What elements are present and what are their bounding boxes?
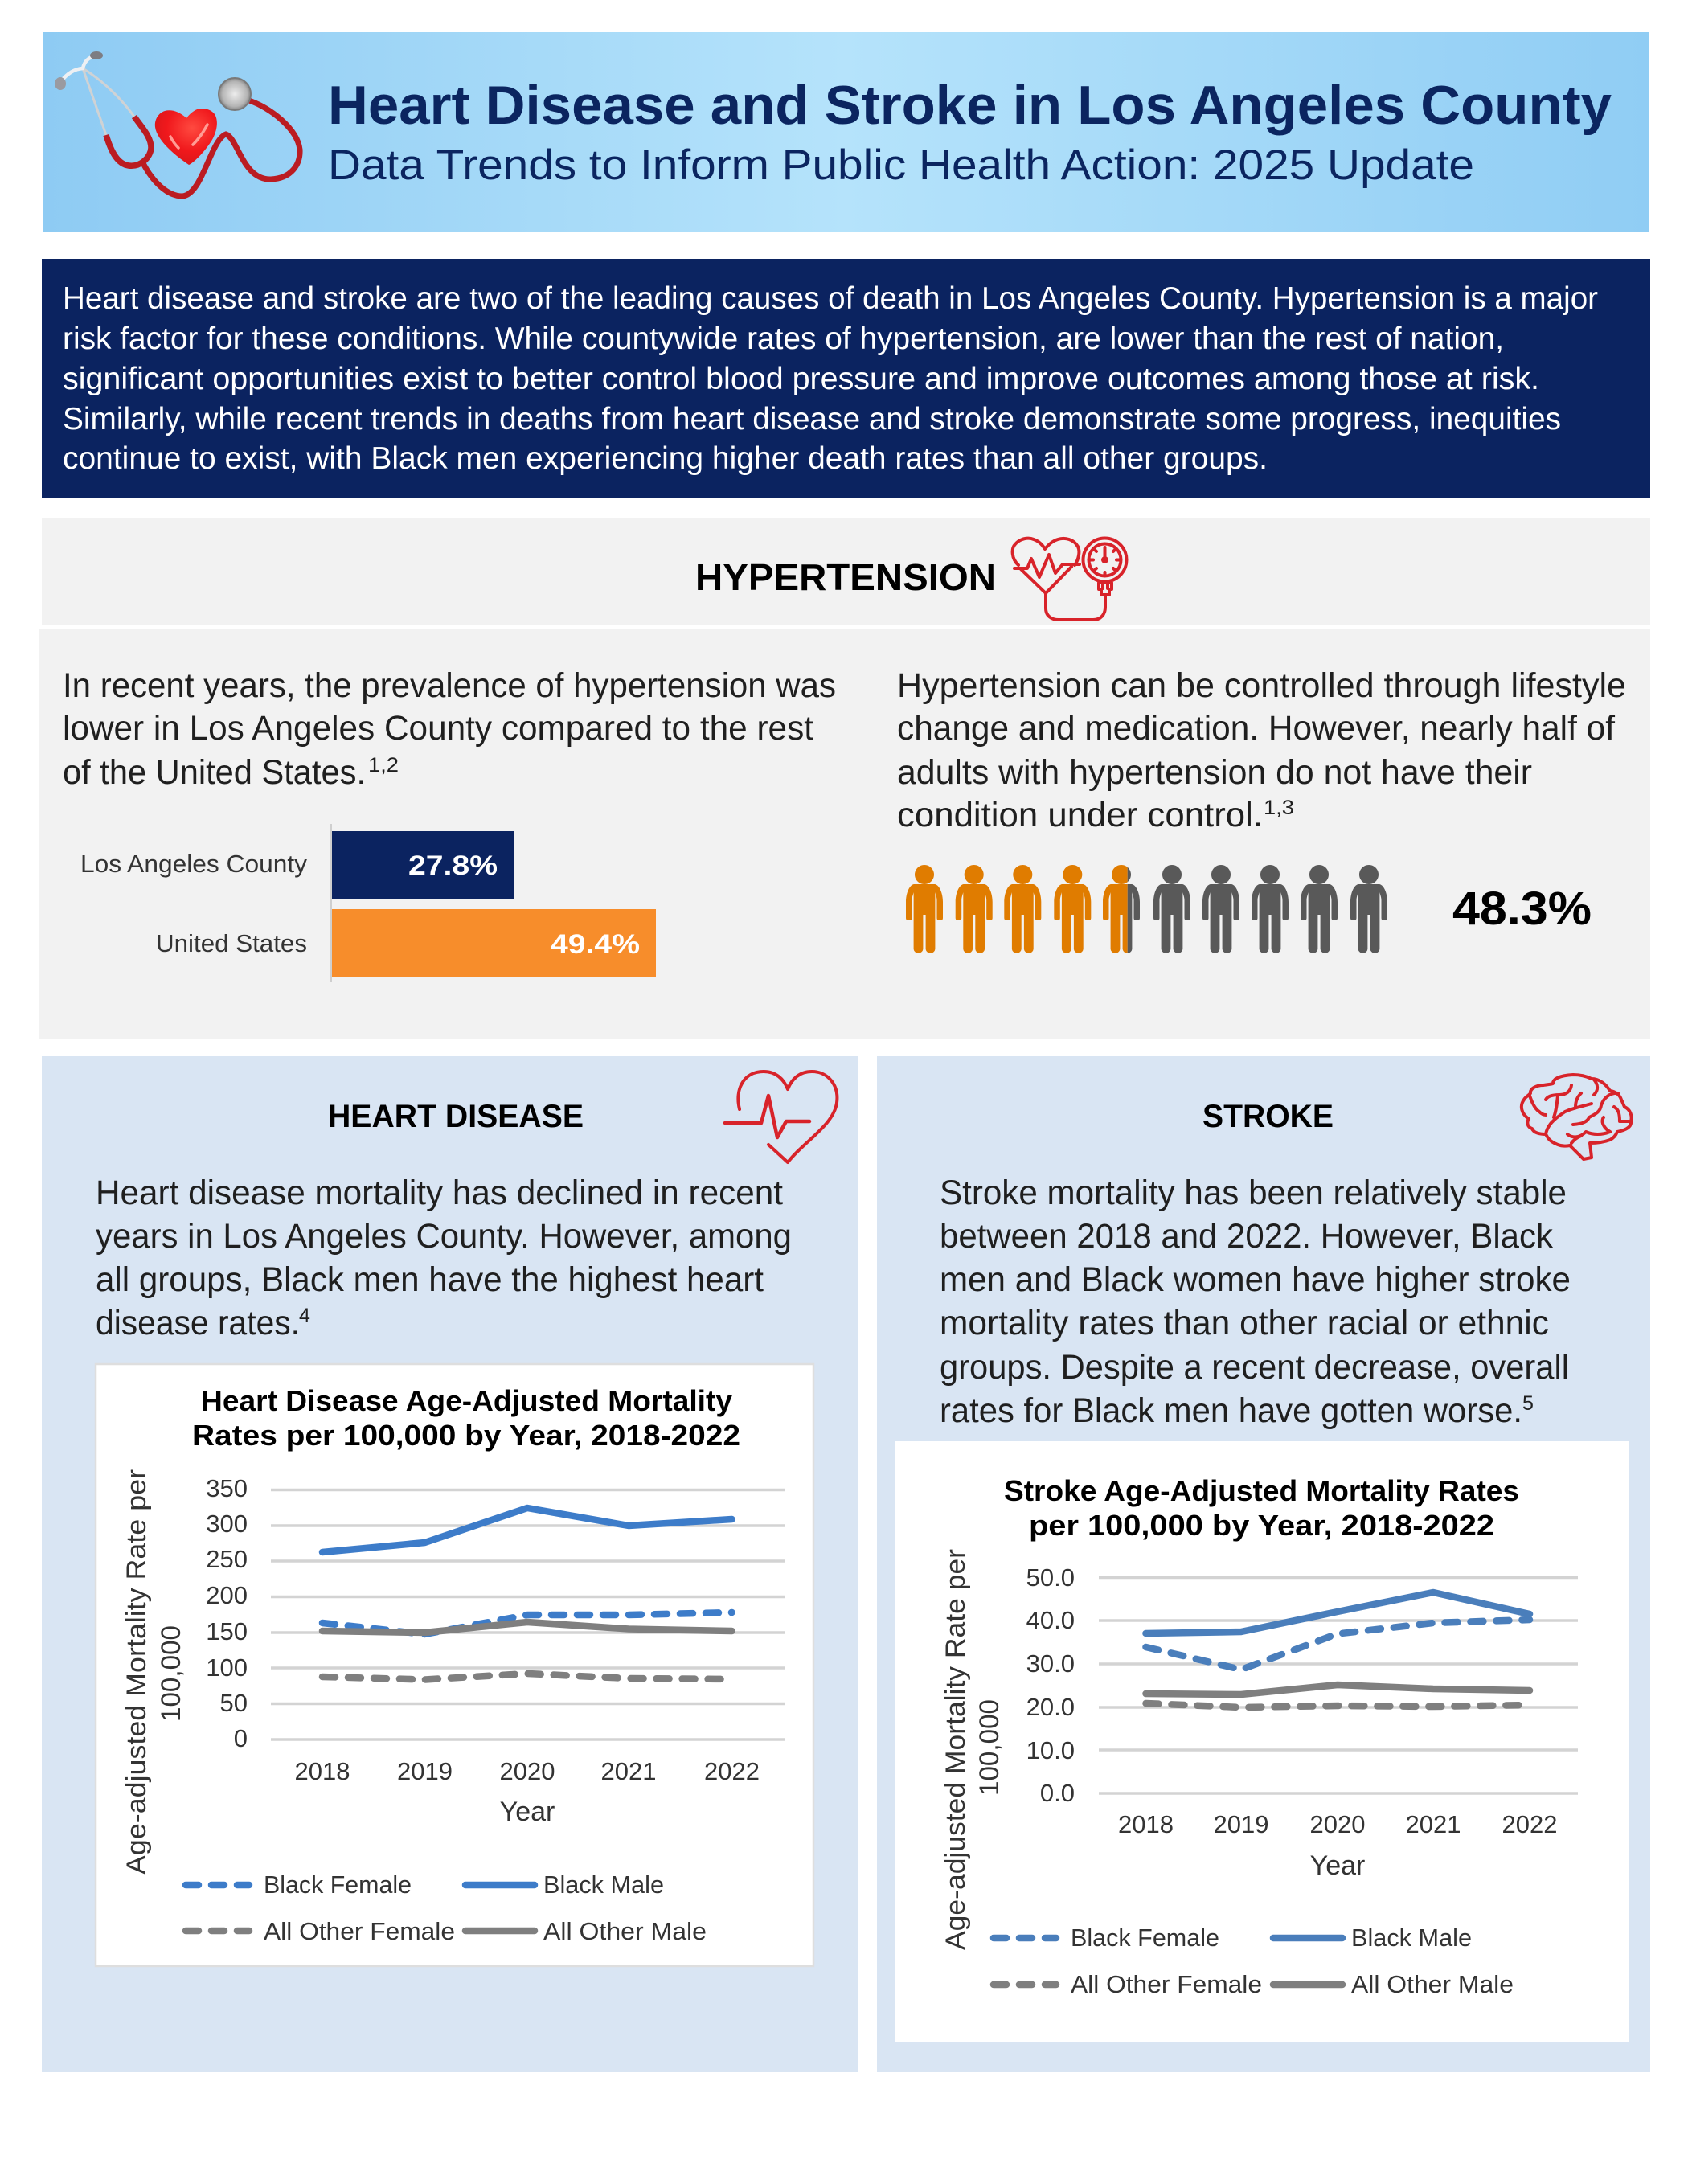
panel: introduction: Similarly, while recent trends in deaths from heart disease and stroke demonstrate some progress, inequities xyxy=(63,402,1561,436)
text block: prevalence: lower in Los Angeles County compared to the rest xyxy=(63,709,813,748)
line: black female xyxy=(1146,1620,1530,1670)
x axis labels: 2022 xyxy=(1502,1810,1557,1838)
bar: Los Angeles County: 27.8% xyxy=(408,850,498,881)
text block: stroke summary: 5 xyxy=(1522,1392,1534,1415)
y axis title: Age-adjusted Mortality Rate per xyxy=(940,1549,971,1950)
panel: introduction: significant opportunities exist to better control blood pressure and improve outcomes among those at risk. xyxy=(63,362,1539,396)
legend: Black Female xyxy=(264,1871,412,1899)
y axis labels: 50 xyxy=(220,1689,248,1717)
text block: stroke summary: mortality rates than other racial or ethnic xyxy=(940,1304,1549,1342)
x axis labels: 2022 xyxy=(704,1757,760,1785)
stat: 48.3%: 48.3% xyxy=(1452,883,1592,935)
text block: stroke summary: Stroke mortality has been relatively stable xyxy=(940,1174,1567,1212)
chart title: Heart Disease Age-Adjusted Mortality xyxy=(201,1384,732,1417)
bar: United States: 49.4% xyxy=(551,929,640,960)
legend: All Other Female xyxy=(264,1917,455,1945)
chart: heart disease mortality xyxy=(96,1364,813,1966)
x axis labels xyxy=(1118,1810,1557,1838)
y axis labels: 200 xyxy=(206,1581,248,1609)
text block: stroke summary xyxy=(940,1174,1571,1430)
panel: hypertension heading: HYPERTENSION xyxy=(695,556,996,598)
panel: introduction xyxy=(42,259,1650,498)
icon: stethoscope with heart xyxy=(55,51,300,196)
x axis labels: 2020 xyxy=(500,1757,555,1785)
x axis labels: 2018 xyxy=(1118,1810,1174,1838)
text block: heart disease summary: 4 xyxy=(299,1305,310,1327)
line: all other male xyxy=(322,1622,731,1633)
chart title: Stroke Age-Adjusted Mortality Rates xyxy=(1004,1474,1519,1507)
title: Heart Disease and Stroke in Los Angeles County xyxy=(328,75,1612,136)
text block: heart disease summary: all groups, Black men have the highest heart xyxy=(96,1260,764,1299)
bar: United States xyxy=(332,909,656,977)
text block: prevalence: 1,2 xyxy=(368,754,399,776)
y axis labels: 40.0 xyxy=(1026,1606,1075,1634)
x axis labels: 2021 xyxy=(601,1757,656,1785)
y axis labels: 20.0 xyxy=(1026,1693,1075,1721)
text block: prevalence xyxy=(63,666,836,792)
legend: All Other Male xyxy=(1351,1970,1514,1998)
x axis title: Year xyxy=(500,1797,555,1827)
legend: Black Male xyxy=(1351,1924,1472,1952)
y axis title xyxy=(121,1469,186,1875)
y axis labels: 0 xyxy=(234,1724,248,1752)
text block: heart disease summary: Heart disease mortality has declined in recent xyxy=(96,1174,783,1212)
line: black male xyxy=(1146,1592,1530,1633)
line: all other female xyxy=(1146,1703,1530,1707)
icon: brain xyxy=(1522,1075,1632,1159)
line: black female xyxy=(322,1612,731,1634)
y axis labels xyxy=(206,1474,248,1752)
text block: control: Hypertension can be controlled through lifestyle xyxy=(897,666,1626,705)
y axis title: 100,000 xyxy=(156,1625,186,1722)
icon: heart and blood pressure gauge xyxy=(1013,539,1127,620)
legend xyxy=(186,1871,707,1945)
line: all other female xyxy=(322,1674,731,1680)
icon: heart with pulse xyxy=(725,1072,837,1162)
y axis labels: 350 xyxy=(206,1474,248,1502)
text block: control: change and medication. However, nearly half of xyxy=(897,709,1616,748)
chart title: Rates per 100,000 by Year, 2018-2022 xyxy=(192,1419,740,1452)
y axis labels: 0.0 xyxy=(1040,1779,1075,1807)
panel: stroke xyxy=(877,1056,1650,2072)
text block: control xyxy=(897,666,1626,834)
chart title xyxy=(192,1384,740,1452)
text block: heart disease summary xyxy=(96,1174,792,1342)
text block: stroke summary: groups. Despite a recent decrease, overall xyxy=(940,1348,1569,1387)
header banner xyxy=(43,32,1649,232)
heading: HEART DISEASE xyxy=(328,1099,584,1134)
y axis labels: 50.0 xyxy=(1026,1563,1075,1592)
line: all other male xyxy=(1146,1685,1530,1694)
y axis title: 100,000 xyxy=(974,1699,1005,1796)
bar chart: prevalence of hypertension xyxy=(80,824,656,982)
panel: introduction: Heart disease and stroke are two of the leading causes of death in Los Angeles County. Hypertension is a major xyxy=(63,281,1598,316)
legend: All Other Male xyxy=(543,1917,707,1945)
bar chart: prevalence of hypertension: Los Angeles County xyxy=(80,850,308,878)
panel: hypertension heading xyxy=(42,518,1650,625)
text block: control: condition under control. xyxy=(897,796,1263,834)
x axis labels xyxy=(295,1757,760,1785)
chart: stroke mortality xyxy=(895,1441,1629,2042)
panel: hypertension content xyxy=(39,629,1650,1039)
x axis labels: 2020 xyxy=(1310,1810,1365,1838)
legend xyxy=(994,1924,1514,1998)
legend: All Other Female xyxy=(1071,1970,1262,1998)
text block: heart disease summary: disease rates. xyxy=(96,1304,300,1342)
x axis title: Year xyxy=(1310,1850,1365,1881)
text block: control: 1,3 xyxy=(1264,797,1294,819)
text block: prevalence: In recent years, the prevalence of hypertension was xyxy=(63,666,836,705)
subtitle: Data Trends to Inform Public Health Action: 2025 Update xyxy=(328,141,1474,189)
y axis labels: 10.0 xyxy=(1026,1736,1075,1764)
y axis labels: 300 xyxy=(206,1510,248,1538)
bar chart: prevalence of hypertension: United States xyxy=(156,929,307,957)
y axis labels xyxy=(1026,1563,1075,1807)
text block: stroke summary: rates for Black men have gotten worse. xyxy=(940,1391,1522,1430)
text block: stroke summary: between 2018 and 2022. However, Black xyxy=(940,1217,1553,1256)
panel: introduction: risk factor for these conditions. While countywide rates of hypertension, are lower than the rest of nation, xyxy=(63,322,1504,356)
line: black male xyxy=(322,1508,731,1552)
chart title: per 100,000 by Year, 2018-2022 xyxy=(1029,1509,1494,1542)
x axis labels: 2021 xyxy=(1406,1810,1461,1838)
y axis title: Age-adjusted Mortality Rate per xyxy=(121,1469,152,1875)
x axis labels: 2019 xyxy=(1214,1810,1268,1838)
bar: Los Angeles County xyxy=(332,831,514,899)
y axis labels: 100 xyxy=(206,1653,248,1682)
legend: Black Female xyxy=(1071,1924,1219,1952)
y axis labels: 150 xyxy=(206,1617,248,1645)
text block: control: adults with hypertension do not have their xyxy=(897,753,1532,792)
text block: prevalence: of the United States. xyxy=(63,753,366,792)
text block: heart disease summary: years in Los Angeles County. However, among xyxy=(96,1217,792,1256)
text block: stroke summary: men and Black women have higher stroke xyxy=(940,1260,1571,1299)
y axis labels: 250 xyxy=(206,1545,248,1573)
pictogram: 48.3 percent of people xyxy=(906,865,1387,953)
legend: Black Male xyxy=(543,1871,664,1899)
y axis title xyxy=(940,1549,1005,1950)
chart title xyxy=(1004,1474,1519,1542)
x axis labels: 2018 xyxy=(295,1757,350,1785)
y axis labels: 30.0 xyxy=(1026,1649,1075,1678)
x axis labels: 2019 xyxy=(397,1757,453,1785)
panel: heart disease xyxy=(42,1056,858,2072)
heading: STROKE xyxy=(1202,1099,1334,1134)
panel: introduction: continue to exist, with Black men experiencing higher death rates than all other groups. xyxy=(63,441,1268,476)
